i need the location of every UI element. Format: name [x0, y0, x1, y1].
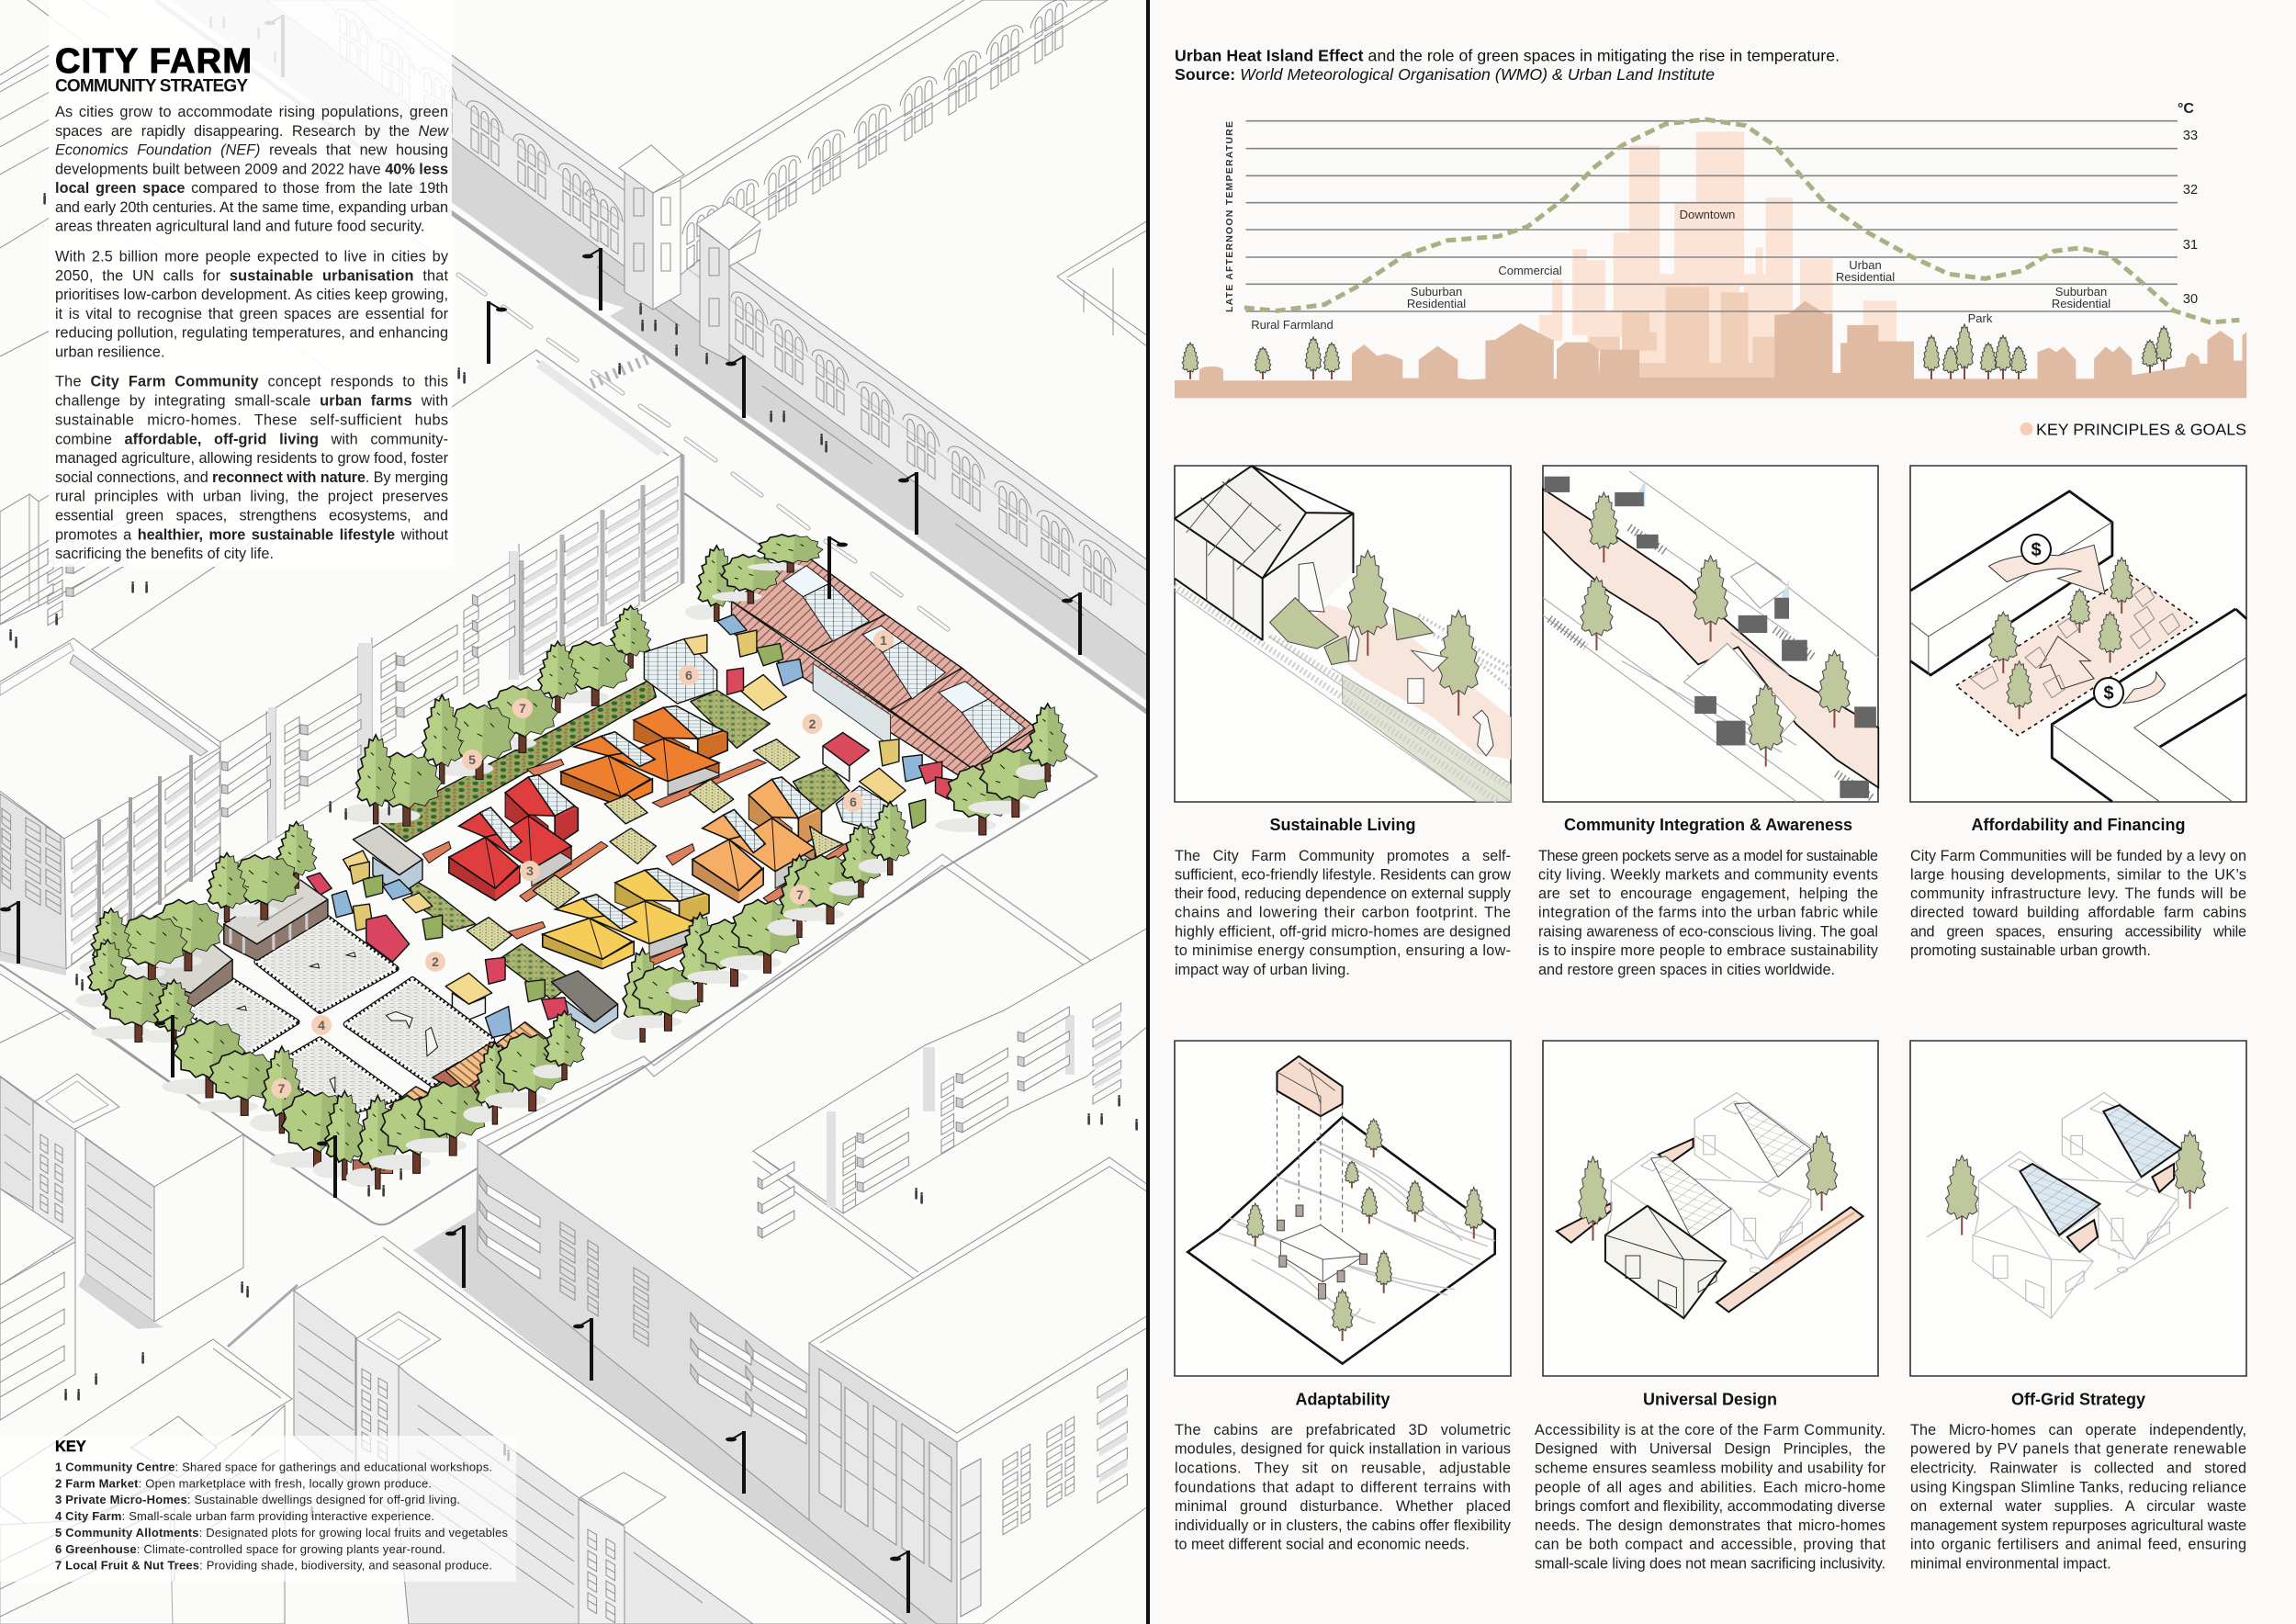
long apartment block with roof and balconies [92, 350, 682, 873]
paragraph one: Economics Foundation (NEF) reveals that new housing [55, 141, 448, 158]
chart heading: Urban Heat Island Effect and the role of green spaces in mitigating the rise in temperature. [1175, 46, 1840, 64]
paragraph three: essential green spaces, strengthens ecosystems, and [55, 507, 448, 524]
text: adaptability [1175, 1391, 1512, 1552]
key items: 5 Community Allotments: Designated plots for growing local fruits and vegetables [55, 1526, 509, 1539]
text: universal design [1535, 1391, 1886, 1573]
text: off-grid strategy: minimal environmental impact. [1910, 1556, 2111, 1573]
planting beds [410, 739, 843, 999]
micro-home clusters [422, 705, 851, 970]
numbered site markers: 5 [468, 752, 476, 767]
arched windows on long facade [335, 1, 1116, 610]
text: sustainable living: chains and lowering their carbon footprint. The [1175, 905, 1511, 921]
text: affordability and financing: large housing developments, similar to the UK’s [1910, 867, 2246, 884]
text: affordability and financing: promoting sustainable urban growth. [1910, 942, 2151, 959]
paragraph one: and early 20th centuries. At the same time, expanding urban [55, 199, 448, 216]
key items: 6 Greenhouse: Climate-controlled space for growing plants year-round. [55, 1542, 445, 1556]
text: adaptability: modules, designed for quick installation in various [1175, 1440, 1511, 1457]
chart district labels: Suburban [1411, 285, 1462, 299]
numbered site markers: 3 [526, 863, 534, 878]
chart axis labels: LATE AFTERNOON TEMPERATURE [1224, 121, 1235, 312]
site boundary kerb [0, 493, 1097, 1224]
subtitle: COMMUNITY STRATEGY [55, 77, 248, 96]
paragraph three: sustainable micro-homes. These self-sufficient hubs [55, 412, 448, 428]
text: universal design: small-scale living does not mean sacrificing inclusivity. [1535, 1556, 1885, 1573]
market stalls and greenhouses north end [644, 615, 962, 830]
title: CITY FARM [55, 42, 252, 81]
text: off-grid strategy: powered by PV panels that generate renewable [1910, 1440, 2246, 1457]
paragraph one: As cities grow to accommodate rising populations, green [55, 104, 448, 120]
text: sustainable living: The City Farm Community promotes a self- [1175, 848, 1511, 864]
paragraph two: prioritises low-carbon development. As cities keep growing, [55, 287, 448, 303]
corner towers [619, 145, 760, 361]
paragraph two: 2050, the UN calls for sustainable urbanisation that [55, 268, 448, 285]
bottom left blocks [0, 1189, 292, 1624]
lower right wing [478, 854, 1148, 1279]
text: off-grid strategy: on external water supplies. A circular waste [1910, 1498, 2246, 1515]
trees behind site north [344, 535, 822, 826]
allotment strip [379, 679, 656, 841]
animal pens [187, 918, 492, 1113]
city farm site illustration [76, 535, 1067, 1189]
text: sustainable living: Sustainable Living [1269, 816, 1416, 834]
chart district labels: Residential [2052, 297, 2110, 310]
chart district labels [1251, 208, 2110, 332]
right page background [1148, 0, 2296, 1624]
text: affordability and financing: Affordability and Financing [1971, 816, 2186, 834]
key items: 2 Farm Market: Open marketplace with fresh, locally grown produce. [55, 1477, 432, 1490]
text: sustainable living: their food, reducing dependence on external supply [1175, 885, 1512, 902]
key items: 4 City Farm: Small-scale urban farm providing interactive experience. [55, 1509, 434, 1523]
text: off-grid strategy: management system repurposes agricultural waste [1910, 1517, 2246, 1534]
intro text panel [49, 0, 452, 567]
paragraph three [55, 373, 449, 562]
large corner block lower right [809, 1157, 1148, 1624]
text: universal design: brings comfort and flexibility, accommodating diverse [1535, 1498, 1885, 1515]
key panel [0, 1436, 516, 1582]
paragraph one: areas threaten agricultural land and future food security. [55, 219, 424, 235]
chart axis labels: 33 [2183, 129, 2198, 143]
text: affordability and financing: directed toward building affordable farm cabins [1910, 905, 2246, 921]
text: community integration and awareness: is to inspire more people to embrace sustainability [1538, 942, 1879, 959]
chart district labels: Downtown [1680, 208, 1735, 221]
text: sustainable living [1175, 816, 1512, 978]
text: adaptability: to meet different social and economic needs. [1175, 1536, 1469, 1552]
paragraph three: combine affordable, off-grid living with community- [55, 432, 448, 448]
numbered site markers: 7 [519, 701, 526, 716]
key items: 1 Community Centre: Shared space for gatherings and educational workshops. [55, 1460, 492, 1473]
key principles legend: KEY PRINCIPLES & GOALS [2036, 421, 2246, 439]
text: adaptability: foundations that adapt to different terrains with [1175, 1479, 1511, 1495]
text: affordability and financing: City Farm Communities will be funded by a levy on [1910, 848, 2246, 864]
text: off-grid strategy: The Micro-homes can operate independently, [1910, 1422, 2246, 1438]
numbered site markers: 7 [796, 887, 804, 902]
street lamps [0, 15, 1080, 1613]
text: sustainable living: highly efficient, off-grid micro-homes are designed [1175, 924, 1511, 941]
paragraph one [55, 104, 449, 235]
paragraph two [55, 248, 449, 360]
numbered site markers: 6 [850, 795, 857, 809]
chart axis labels: 32 [2183, 183, 2198, 197]
middle lower building roof and facade [294, 1236, 906, 1624]
icon: dollar coin top [2021, 535, 2051, 564]
chart district labels: Residential [1836, 270, 1895, 284]
street shadow between lower buildings [228, 1140, 957, 1624]
text: community integration and awareness [1538, 816, 1879, 978]
corner building left [0, 638, 220, 976]
paragraph three: rural principles with urban living, the project preserves [55, 489, 448, 505]
small block lower left with roof box [0, 974, 243, 1329]
text: off-grid strategy: using Kingspan Slimline Tanks, reducing reliance [1910, 1479, 2246, 1495]
paragraph three: sacrificing the benefits of city life. [55, 546, 274, 562]
chart district labels: Urban [1849, 258, 1882, 272]
text: universal design: Designed with Universal Design Principles, the [1535, 1440, 1885, 1457]
text: community integration and awareness: raising awareness of eco-conscious living. The goal [1538, 924, 1878, 941]
text: sustainable living: sufficient, eco-friendly lifestyle. Residents can grow [1175, 867, 1511, 884]
chart axis labels: 31 [2183, 238, 2198, 253]
paragraph two: it is vital to recognise that green spaces are essential for [55, 306, 449, 322]
centre divider [1146, 0, 1150, 1624]
text: affordability and financing: community infrastructure levy. The funds will be [1910, 885, 2246, 902]
numbered site markers: 1 [880, 633, 887, 648]
urban heat island chart [1175, 101, 2246, 398]
text: off-grid strategy: Off-Grid Strategy [2011, 1391, 2145, 1409]
map: isometric city farm site plan [0, 0, 1148, 1624]
paragraph three: promotes a healthier, more sustainable lifestyle without [55, 527, 448, 544]
key items [55, 1460, 509, 1573]
text: adaptability: minimal ground disturbance. Whether placed [1175, 1498, 1511, 1515]
chart heading [1175, 46, 1840, 84]
paragraph three: The City Farm Community concept responds to this [55, 373, 448, 389]
numbered site markers: 2 [432, 954, 439, 969]
icon: dollar coin top: $ [2031, 540, 2042, 560]
paragraph one: local green space compared to those from the late 19th [55, 180, 448, 197]
numbered site markers: 4 [318, 1018, 325, 1032]
text: off-grid strategy: into organic fertilisers and animal feed, ensuring [1910, 1536, 2246, 1552]
chart district labels: Rural Farmland [1251, 318, 1334, 332]
barns [141, 877, 328, 1007]
text: adaptability: Adaptability [1295, 1391, 1390, 1409]
numbered site markers: 2 [809, 716, 816, 731]
numbered site markers [272, 630, 894, 1099]
chart heading: Source: World Meteorological Organisation (WMO) & Urban Land Institute [1175, 65, 1715, 84]
text: universal design: Universal Design [1643, 1391, 1777, 1409]
chart district labels: Commercial [1498, 264, 1562, 277]
key heading: KEY [55, 1438, 86, 1455]
text: universal design: scheme ensures seamless mobility and usability for [1535, 1460, 1886, 1477]
icon: dollar coin bottom [2094, 678, 2123, 707]
paragraph one: developments built between 2009 and 2022 have 40% less [55, 162, 448, 178]
paragraph two: With 2.5 billion more people expected to live in cities by [55, 248, 449, 265]
text: adaptability: locations. They sit on reusable, adjustable [1175, 1460, 1511, 1477]
text: universal design: can be both compact and accessible, proving that [1535, 1536, 1886, 1552]
paragraph three: social connections, and reconnect with nature. By merging [55, 469, 448, 486]
timber benches and trees south edge [76, 704, 1067, 1189]
text: community integration and awareness: city living. Weekly markets and community events [1538, 867, 1878, 884]
road centre dashes and crossing [413, 241, 948, 629]
text: community integration and awareness: and restore green spaces in cities worldwide. [1538, 962, 1835, 978]
upper right rooftop corner [1057, 220, 1148, 347]
panel: community integration illustration [1543, 466, 1878, 802]
text: community integration and awareness: Community Integration & Awareness [1564, 816, 1852, 834]
upper left background buildings [0, 0, 536, 649]
text: universal design: Accessibility is at the core of the Farm Community. [1535, 1422, 1885, 1438]
text: off-grid strategy [1910, 1391, 2246, 1573]
numbered site markers: 7 [278, 1081, 286, 1096]
text: affordability and financing: and green spaces, ensuring accessibility while [1910, 924, 2246, 941]
chart axis labels [1224, 101, 2198, 312]
text: adaptability: individually or in clusters, the cabins offer flexibility [1175, 1517, 1512, 1534]
skyline trees [1182, 324, 2172, 379]
chart district labels: Park [1968, 311, 1993, 325]
chart axis labels: 30 [2183, 292, 2198, 307]
paragraph two: reducing pollution, regulating temperatures, and enhancing [55, 325, 448, 342]
temperature curve [1244, 119, 2239, 322]
icon: dollar coin bottom: $ [2103, 683, 2114, 704]
skyline silhouette [1175, 131, 2246, 398]
text: off-grid strategy: electricity. Rainwater is collected and stored [1910, 1460, 2246, 1477]
text: sustainable living: to minimise energy consumption, ensuring a low- [1175, 942, 1511, 959]
key items: 3 Private Micro-Homes: Sustainable dwellings designed for off-grid living. [55, 1493, 460, 1506]
text: universal design: people of all ages and abilities. Each micro-home [1535, 1479, 1885, 1495]
chart district labels: Suburban [2055, 285, 2107, 299]
community centre building [732, 554, 1036, 784]
text: community integration and awareness: These green pockets serve as a model for sustainable [1538, 848, 1878, 864]
temperature grid lines [1245, 121, 2178, 311]
paragraph one: spaces are rapidly disappearing. Research by the New [55, 123, 449, 140]
text: affordability and financing [1910, 816, 2246, 959]
text: community integration and awareness: are set to encourage engagement, helping the [1538, 885, 1878, 902]
paragraph two: urban resilience. [55, 344, 164, 360]
text: adaptability: The cabins are prefabricated 3D volumetric [1175, 1422, 1511, 1438]
panel: affordability and financing illustration [1910, 466, 2246, 802]
panel: off-grid strategy illustration [1910, 1041, 2246, 1376]
panel: universal design illustration [1543, 1041, 1878, 1376]
panel: sustainable living illustration [1175, 466, 1511, 802]
text: sustainable living: impact way of urban living. [1175, 962, 1350, 978]
numbered site markers: 6 [685, 668, 692, 682]
paragraph three: managed agriculture, allowing residents to grow food, foster [55, 450, 449, 467]
key items: 7 Local Fruit & Nut Trees: Providing shade, biodiversity, and seasonal produce. [55, 1558, 492, 1573]
paragraph three: challenge by integrating small-scale urban farms with [55, 393, 448, 410]
street shadow and facade along upper road [155, 0, 1148, 713]
pedestrians [9, 17, 1138, 1518]
central market stalls and sheds [307, 826, 618, 1038]
white upper wing with arched windows [680, 0, 1108, 276]
chart district labels: Residential [1407, 297, 1466, 310]
chart axis labels: °C [2178, 101, 2194, 117]
text: community integration and awareness: integration of the farms into the urban fabric while [1538, 905, 1878, 921]
panel: adaptability illustration [1175, 1041, 1511, 1376]
text: universal design: needs. The design demonstrates that micro-homes [1535, 1517, 1885, 1534]
